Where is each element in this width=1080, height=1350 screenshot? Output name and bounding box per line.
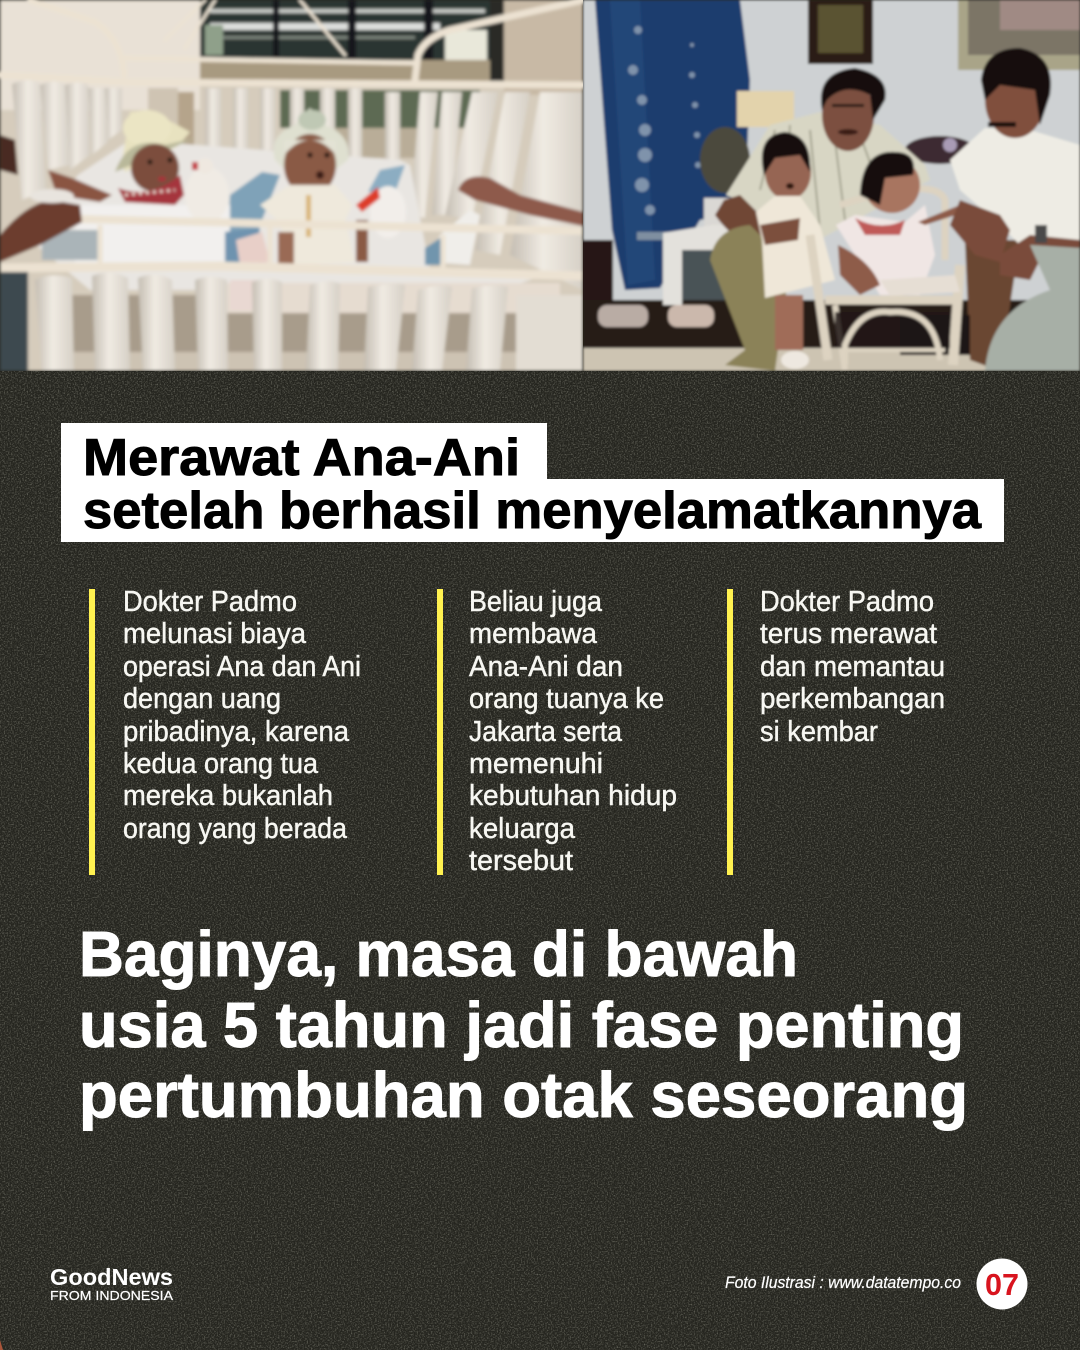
- title box top: [61, 423, 547, 481]
- mid and lower crib rails: [0, 219, 583, 276]
- logo: GoodNews from Indonesia: [50, 1264, 174, 1303]
- wicker chair: [810, 189, 960, 370]
- standing baby: [756, 132, 835, 369]
- column two: bringing family to Jakarta: Ana-Ani dan: [469, 651, 623, 683]
- sofa: [965, 240, 1020, 371]
- column two: bringing family to Jakarta: tersebut: [469, 845, 573, 877]
- title line two: setelah berhasil menyelamatkannya: [83, 482, 982, 540]
- logo: GoodNews from Indonesia: FROM INDONESIA: [50, 1289, 174, 1303]
- shoes on floor: [598, 305, 714, 327]
- column two: bringing family to Jakarta: orang tuanya ke: [469, 683, 664, 715]
- column two: bringing family to Jakarta: Jakarta serta: [469, 716, 623, 748]
- younger man: [950, 48, 1080, 371]
- column one: paying for surgery: melunasi biaya: [123, 618, 307, 650]
- column two: bringing family to Jakarta: kebutuhan hidup: [469, 780, 677, 812]
- lower floor of crib: [71, 294, 517, 354]
- large statement: Baginya, masa di bawah: [79, 918, 798, 990]
- wall pictures: [808, 0, 1080, 70]
- column two: bringing family to Jakarta: [437, 586, 677, 877]
- column one: paying for surgery: operasi Ana dan Ani: [123, 651, 361, 683]
- window behind crib: [200, 0, 583, 158]
- column two: bringing family to Jakarta: Beliau juga: [469, 586, 603, 618]
- column one: paying for surgery: [89, 586, 361, 875]
- column one: paying for surgery: mereka bukanlah: [123, 780, 333, 812]
- mattress and bedding: [30, 140, 560, 290]
- logo: GoodNews from Indonesia: GoodNews: [50, 1264, 173, 1290]
- photo credit: Foto Ilustrasi : www.datatempo.co: [725, 1274, 961, 1292]
- upper crib bars: [0, 0, 583, 85]
- title box bottom: [61, 479, 1004, 542]
- hands: [0, 135, 583, 262]
- left baby: [115, 110, 195, 205]
- photo: family with doctor and twins: [583, 0, 1080, 371]
- title line one: Merawat Ana-Ani: [83, 429, 520, 487]
- lower bolsters: [35, 272, 583, 371]
- title block: [61, 423, 1004, 542]
- column three: monitoring the twins: dan memantau: [760, 651, 945, 683]
- column two: bringing family to Jakarta: keluarga: [469, 813, 576, 845]
- column three: monitoring the twins: Dokter Padmo: [760, 586, 934, 618]
- page number badge: 07: [985, 1267, 1019, 1302]
- right baby: [236, 108, 380, 265]
- column two: bringing family to Jakarta: membawa: [469, 618, 598, 650]
- column one: paying for surgery: pribadinya, karena: [123, 716, 350, 748]
- column three: monitoring the twins: terus merawat: [760, 618, 937, 650]
- column two: bringing family to Jakarta: memenuhi: [469, 748, 603, 780]
- page number badge: [976, 1258, 1028, 1310]
- white side table: [663, 198, 744, 305]
- large statement: usia 5 tahun jadi fase penting: [79, 989, 964, 1061]
- blue curtain: [595, 0, 750, 290]
- column three: monitoring the twins: perkembangan: [760, 683, 945, 715]
- column one: paying for surgery: Dokter Padmo: [123, 586, 297, 618]
- lamp and plant: [700, 91, 975, 193]
- column one: paying for surgery: orang yang berada: [123, 813, 348, 845]
- seated baby: [836, 152, 965, 296]
- column one: paying for surgery: dengan uang: [123, 683, 281, 715]
- large statement: pertumbuhan otak seseorang: [79, 1059, 968, 1131]
- photo: twins in hospital crib: [0, 0, 583, 371]
- large statement: [79, 918, 968, 1131]
- older man: [710, 68, 930, 371]
- upper bolsters: [12, 80, 583, 290]
- column one: paying for surgery: kedua orang tua: [123, 748, 319, 780]
- column three: monitoring the twins: [727, 586, 945, 875]
- column three: monitoring the twins: si kembar: [760, 716, 878, 748]
